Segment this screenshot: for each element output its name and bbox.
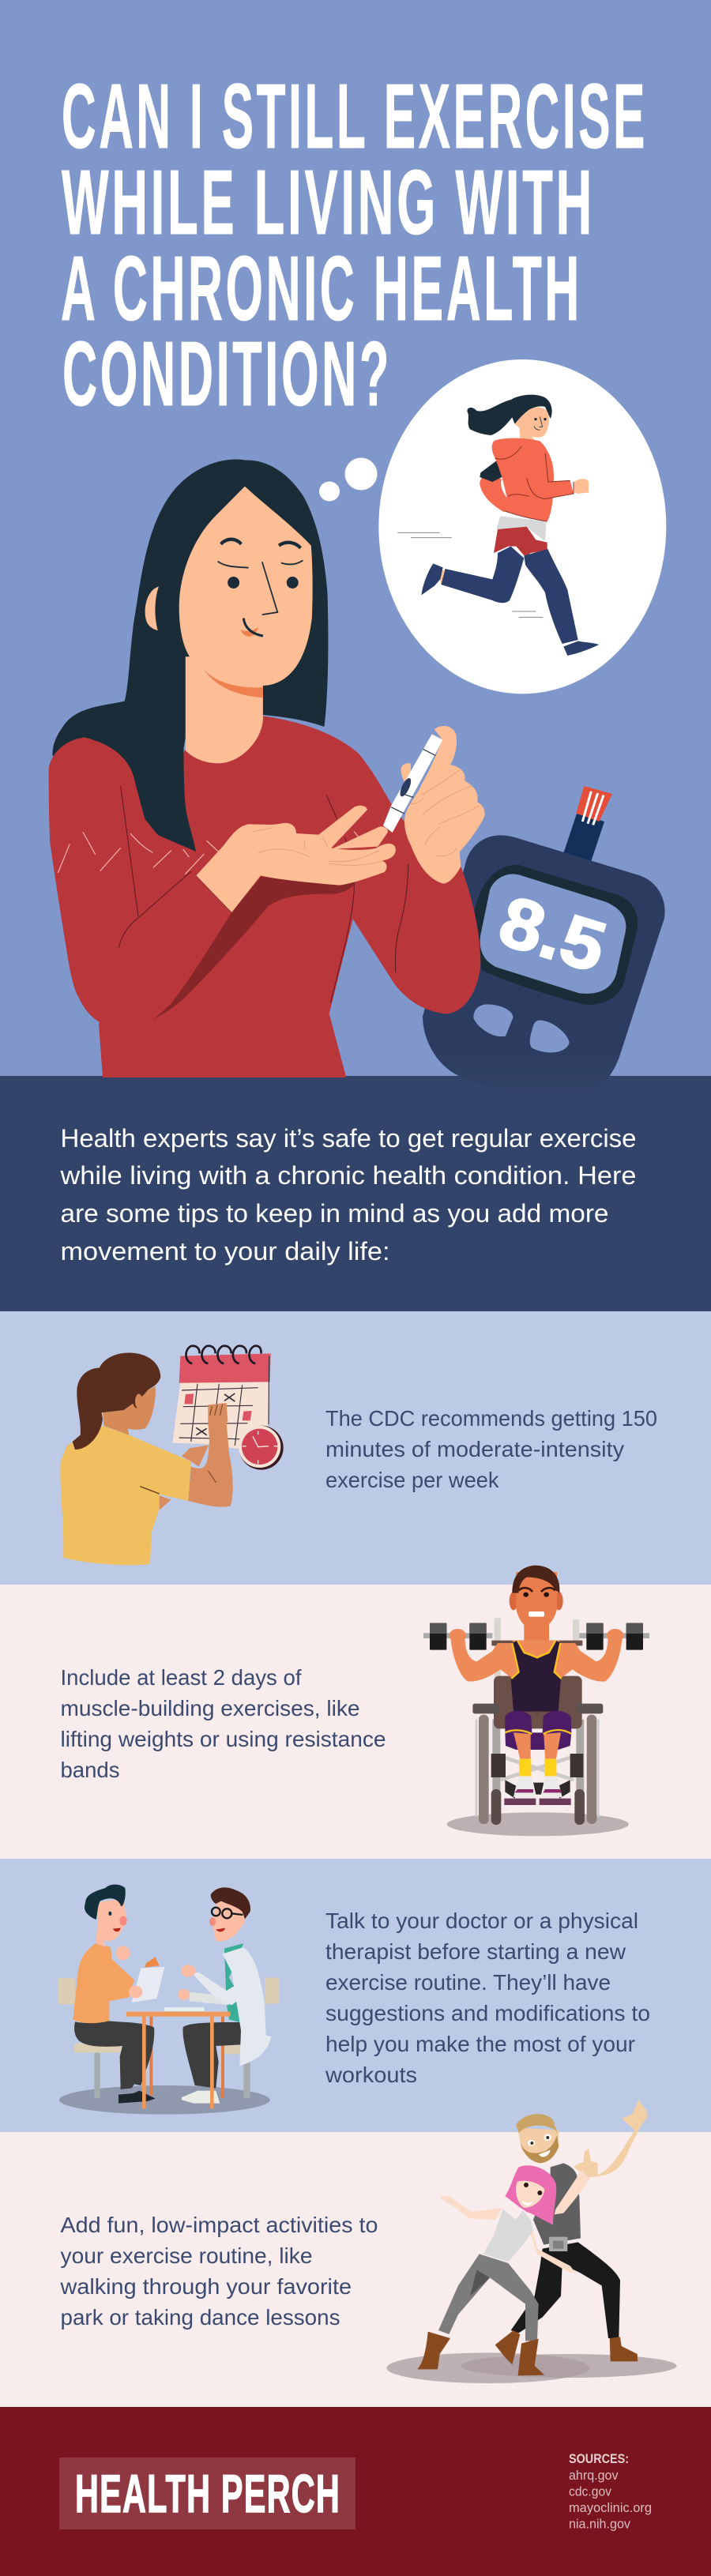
panel: tip 1 background <box>0 1311 711 1585</box>
icon: man in wheelchair lifting dumbbells <box>423 1566 649 1836</box>
sources list: nia.nih.gov <box>569 2517 631 2531</box>
sources list: SOURCES: <box>569 2452 629 2466</box>
tip 4 text: Add fun, low-impact activities to <box>60 2213 378 2237</box>
panel: intro background <box>0 1076 711 1311</box>
tip 2 text: bands <box>60 1758 120 1782</box>
tip 2 text: muscle-building exercises, like <box>60 1696 360 1720</box>
tip 1 text: The CDC recommends getting 150 <box>325 1406 657 1431</box>
tip 3 text: therapist before starting a new <box>325 1939 626 1964</box>
icon: woman marking calendar <box>60 1346 284 1565</box>
title <box>61 65 648 425</box>
panel: tip 4 background <box>0 2132 711 2407</box>
neck and face <box>145 487 313 763</box>
sources list: cdc.gov <box>569 2485 612 2499</box>
intro text: movement to your daily life: <box>60 1237 390 1265</box>
tip 3 text: suggestions and modifications to <box>325 2001 650 2025</box>
tip 3 text: workouts <box>325 2063 417 2087</box>
tip 1 text <box>325 1406 657 1492</box>
intro text: are some tips to keep in mind as you add more <box>60 1199 608 1228</box>
sources list <box>569 2452 652 2531</box>
sources list: mayoclinic.org <box>569 2501 652 2515</box>
intro text <box>59 1124 637 1265</box>
long hair <box>53 460 328 852</box>
tip 1 text: minutes of moderate-intensity <box>325 1437 624 1461</box>
icon: glucose meter: 8.5 <box>491 882 615 988</box>
intro text: while living with a chronic health condition. Here <box>59 1161 637 1190</box>
panel: hero background <box>0 0 711 1077</box>
logo: Health Perch <box>59 2458 356 2529</box>
tip 4 text: walking through your favorite <box>59 2274 352 2299</box>
tip 3 text: exercise routine. They’ll have <box>325 1970 611 1995</box>
tip 2 text: Include at least 2 days of <box>60 1665 302 1690</box>
panel: tip 2 background <box>0 1585 711 1859</box>
title: CONDITION? <box>62 322 392 425</box>
panel: footer background <box>0 2407 711 2576</box>
tip 4 text: park or taking dance lessons <box>60 2305 340 2330</box>
icon: thought dots <box>319 458 378 501</box>
tip 4 text <box>59 2213 378 2330</box>
logo: Health Perch: HEALTH PERCH <box>75 2464 340 2524</box>
sweater torso <box>99 716 480 1077</box>
lancet and right hand <box>383 726 484 884</box>
tip 3 text <box>325 1908 650 2087</box>
tip 3 text: Talk to your doctor or a physical <box>325 1908 638 1933</box>
tip 4 text: your exercise routine, like <box>60 2243 313 2268</box>
tip 3 text: help you make the most of your <box>325 2032 635 2056</box>
intro text: Health experts say it’s safe to get regular exercise <box>60 1124 637 1153</box>
icon: thought bubble with runner <box>378 359 666 694</box>
icon: woman testing blood sugar <box>49 460 484 1077</box>
sources list: ahrq.gov <box>569 2469 619 2483</box>
icon: glucose meter <box>423 786 665 1100</box>
tip 1 text: exercise per week <box>325 1468 499 1492</box>
icon: patient talking to doctor <box>58 1885 279 2115</box>
panel: tip 3 background <box>0 1859 711 2132</box>
sleeve and hand <box>49 737 396 1029</box>
tip 2 text: lifting weights or using resistance <box>60 1727 386 1751</box>
tip 2 text <box>60 1665 386 1782</box>
icon: couple dancing <box>386 2100 677 2383</box>
